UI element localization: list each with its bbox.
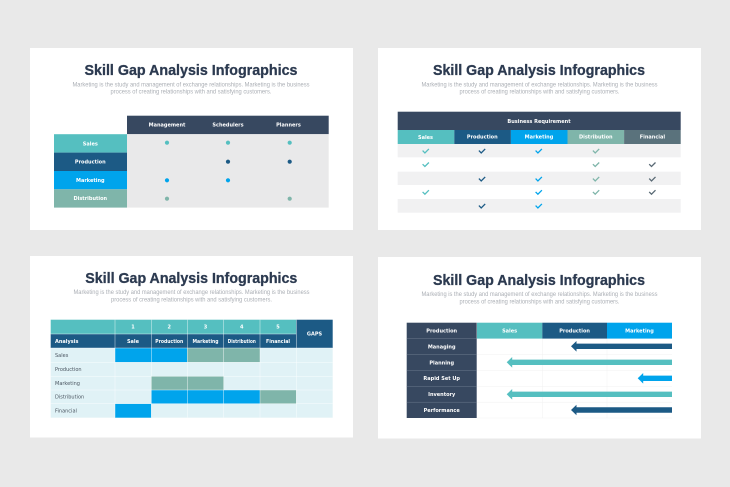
left column: Planning (429, 360, 454, 366)
arrow: inventory (507, 389, 672, 400)
table header (127, 116, 329, 134)
table header: Planners (276, 122, 301, 128)
number header row: 1 (131, 324, 135, 330)
header: business requirement: Business Requirement (507, 119, 571, 125)
arrow: managing (571, 341, 672, 352)
title: Skill Gap Analysis Infographics (84, 62, 298, 79)
row labels: Marketing (76, 178, 105, 184)
subtitle: Marketing is the study and management of exchange relationships. Marketing is the business (74, 289, 310, 296)
column headers: Financial (640, 135, 665, 141)
row labels: Distribution (73, 196, 108, 202)
column headers (398, 130, 681, 144)
number header row: 2 (168, 324, 172, 330)
row labels: Production (75, 160, 106, 166)
subtitle (422, 81, 658, 96)
column headers: Marketing (625, 329, 654, 335)
subtitle: process of creating relationships with and satisfying customers. (460, 298, 620, 305)
category header row: Marketing (192, 339, 219, 345)
subtitle: process of creating relationships with and satisfying customers. (110, 89, 272, 96)
check marks: sales (423, 149, 429, 194)
row labels: Sales (55, 353, 69, 359)
column headers: Sales (502, 329, 517, 335)
gaps header: GAPS (307, 332, 323, 338)
check marks: production (479, 149, 485, 208)
subtitle (422, 291, 658, 305)
arrow: performance (571, 405, 672, 415)
subtitle: Marketing is the study and management of exchange relationships. Marketing is the business (422, 81, 658, 88)
check marks: marketing (536, 149, 542, 208)
row labels: Marketing (55, 381, 80, 387)
check marks: financial (649, 162, 656, 194)
table header: Schedulers (212, 122, 244, 128)
subtitle: Marketing is the study and management of exchange relationships. Marketing is the business (422, 291, 658, 298)
left column (407, 323, 477, 418)
panel: business requirement checks (378, 48, 701, 230)
row labels (54, 134, 127, 208)
column headers: Marketing (525, 135, 554, 141)
title: Skill Gap Analysis Infographics (433, 272, 645, 289)
panel: arrow timeline (378, 257, 701, 438)
table body (127, 134, 329, 208)
column headers: Sales (418, 135, 433, 141)
left column: Managing (428, 344, 456, 350)
arrow: rapid set up (638, 373, 672, 384)
number header row (51, 320, 296, 334)
row labels: Financial (55, 408, 77, 414)
category header row: Analysis (55, 339, 78, 345)
number header row: 4 (240, 324, 244, 330)
category header row: Financial (266, 339, 290, 345)
row labels: Production (55, 367, 82, 373)
table header: Management (149, 122, 186, 128)
column headers: Production (467, 135, 498, 141)
grid background (51, 348, 333, 418)
subtitle (74, 289, 310, 303)
striped rows (398, 144, 681, 213)
header: business requirement (398, 112, 681, 130)
filled gap cells (115, 348, 296, 418)
subtitle: process of creating relationships with and satisfying customers. (111, 296, 272, 303)
arrow: planning (507, 357, 672, 368)
left column: Inventory (428, 392, 456, 398)
gaps header (296, 320, 333, 348)
category header row: Production (155, 339, 184, 345)
category header row: Distribution (228, 339, 256, 345)
title: Skill Gap Analysis Infographics (85, 270, 297, 287)
check marks: distribution (593, 149, 599, 194)
panel: gap analysis grid (30, 256, 353, 438)
panel: skill matrix dots (30, 48, 353, 230)
column headers (477, 323, 672, 339)
title: Skill Gap Analysis Infographics (433, 62, 645, 79)
subtitle: process of creating relationships with and satisfying customers. (460, 89, 620, 96)
left column: Production (426, 329, 458, 335)
category header row: Sale (127, 339, 140, 345)
skill dots (165, 141, 292, 201)
row labels (55, 353, 84, 414)
column headers: Production (559, 329, 590, 335)
number header row: 3 (204, 324, 208, 330)
number header row: 5 (276, 324, 280, 330)
left column: Rapid Set Up (423, 376, 460, 382)
category header row (51, 334, 296, 348)
row labels: Sales (83, 141, 98, 147)
row labels: Distribution (55, 395, 84, 401)
column headers: Distribution (579, 135, 613, 141)
left column: Performance (424, 408, 460, 414)
subtitle: Marketing is the study and management of exchange relationships. Marketing is the business (72, 81, 310, 88)
subtitle (72, 81, 310, 96)
